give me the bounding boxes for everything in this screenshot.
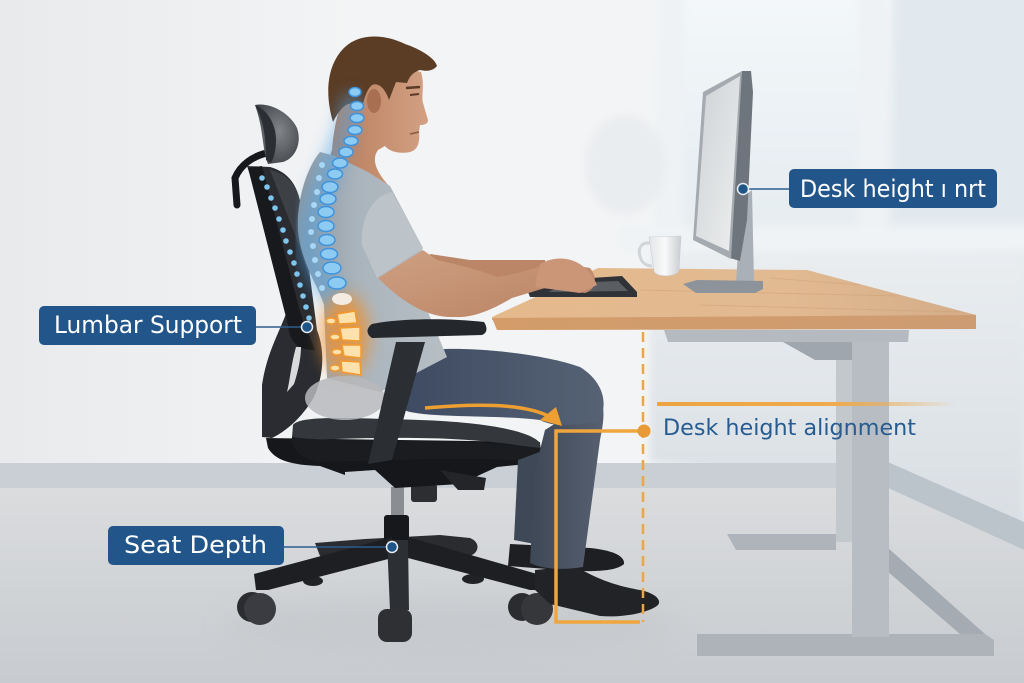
desk frame [727, 534, 836, 550]
arm pad [368, 319, 486, 338]
backrest [247, 166, 322, 438]
hair [328, 36, 437, 122]
keyboard [528, 276, 637, 297]
seat cushion [292, 418, 541, 450]
seat pan and mechanism [266, 438, 540, 488]
seated man [298, 36, 659, 616]
floor [0, 488, 1024, 683]
headrest bracket [235, 152, 272, 205]
lumbar support label [39, 306, 312, 345]
sleeve shade [362, 192, 423, 278]
dashed vertical guide [642, 332, 644, 622]
monitor [683, 71, 763, 293]
wood grain [640, 278, 960, 312]
headrest [255, 105, 299, 164]
thigh [380, 349, 604, 425]
housing [730, 71, 753, 261]
front caster [378, 609, 412, 642]
cervical and thoracic vertebrae [318, 88, 364, 289]
five star base [254, 537, 392, 590]
alignment dot [638, 424, 650, 438]
desktop [492, 268, 976, 320]
brow, eye and mouth [406, 87, 420, 134]
coffee mug [639, 236, 681, 276]
pelvis [305, 376, 385, 420]
thigh arrow [425, 405, 552, 418]
leader line [255, 326, 307, 328]
label text: Desk height ı nrt [800, 175, 986, 203]
desk height label [738, 169, 997, 208]
alignment rule [657, 402, 957, 406]
desk [492, 268, 994, 656]
ear [367, 89, 381, 113]
far lower leg [514, 450, 545, 545]
label box [789, 169, 997, 208]
knee angle guide [556, 431, 645, 622]
t-shirt [298, 152, 447, 392]
label text: Seat Depth [124, 531, 267, 559]
spine overlay [305, 88, 385, 420]
leader dot [302, 322, 312, 332]
leader line [743, 188, 790, 190]
right caster [508, 593, 536, 621]
rear base [315, 535, 478, 556]
stand [736, 190, 754, 284]
gas lift [391, 487, 404, 517]
left caster [237, 592, 267, 622]
chair [235, 105, 553, 642]
blue glow [309, 95, 352, 300]
skirting [0, 463, 890, 488]
lumbar vertebrae [326, 311, 361, 375]
label box [39, 306, 256, 345]
near shoe [535, 566, 659, 616]
near lower leg [530, 395, 603, 569]
screen [696, 76, 740, 251]
near arm [378, 250, 595, 317]
far shoe [508, 544, 624, 571]
neck and face [330, 60, 428, 187]
hands [535, 259, 597, 293]
leader line [283, 546, 391, 548]
alignment label: Desk height alignment [663, 415, 916, 441]
leader dot [738, 184, 748, 194]
orange glow [321, 293, 369, 377]
label text: Lumbar Support [54, 311, 242, 339]
far forearm [430, 254, 548, 278]
arm post [368, 342, 425, 464]
label box [108, 526, 284, 565]
spinous processes [308, 162, 325, 291]
right wall [650, 253, 1024, 545]
seat depth label [108, 526, 398, 565]
window [585, 0, 1024, 252]
transition vertebra [332, 293, 352, 305]
armrest [368, 319, 486, 464]
leader dot [386, 542, 398, 552]
alignment guides [425, 332, 957, 622]
backrest air dots [259, 175, 312, 321]
